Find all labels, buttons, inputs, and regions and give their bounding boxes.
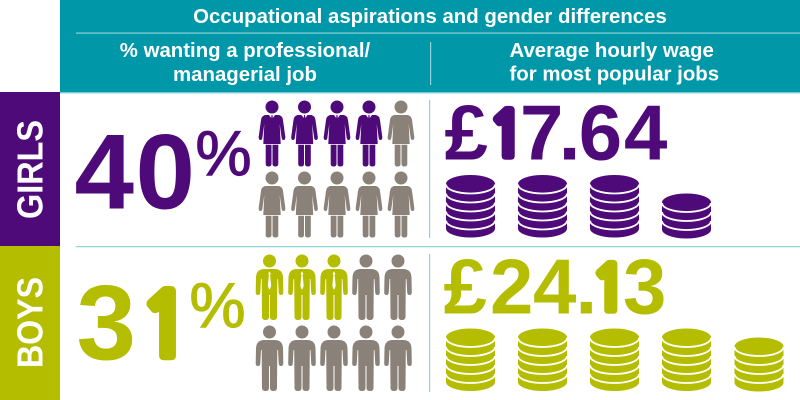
header panel <box>60 0 800 94</box>
row label: girls <box>0 92 60 246</box>
boys wage: 3 <box>623 242 666 330</box>
heading: left column: managerial job <box>173 64 317 86</box>
heading: right column: Average hourly wage <box>510 40 714 62</box>
boys percentage: 1 <box>139 283 192 370</box>
girls percentage: 40 <box>74 112 197 232</box>
girls wage: 4 <box>624 88 667 176</box>
row label: boys: BOYS <box>10 277 50 368</box>
icon array: boys 3 of 10 <box>256 254 412 391</box>
heading: left column: % wanting a professional/ <box>120 40 371 62</box>
coin stacks: girls <box>446 175 711 238</box>
girls wage: 7 <box>520 88 563 176</box>
boys percentage: % <box>190 271 246 341</box>
heading: main title: Occupational aspirations and gender differences <box>193 6 667 28</box>
boys wage: 4 <box>533 242 576 330</box>
boys wage: 1 <box>591 259 628 320</box>
row divider <box>76 246 800 247</box>
girls wage: . <box>559 88 580 176</box>
boys wage: 2 <box>490 242 533 330</box>
girls wage: 6 <box>579 88 622 176</box>
girls wage: £ <box>444 88 488 176</box>
boys percentage: 3 <box>76 262 136 382</box>
boys wage: £ <box>444 242 487 330</box>
column divider girls <box>429 100 430 238</box>
row label: boys <box>0 246 60 400</box>
icon array: girls 4 of 10 <box>259 100 414 238</box>
coin stacks: boys <box>446 328 784 392</box>
girls wage: 1 <box>488 105 526 166</box>
boys wage: . <box>576 242 597 330</box>
girls percentage: % <box>196 119 252 189</box>
row label: girls: GIRLS <box>10 120 50 219</box>
heading: right column: for most popular jobs <box>510 64 719 86</box>
column divider boys <box>429 254 430 392</box>
